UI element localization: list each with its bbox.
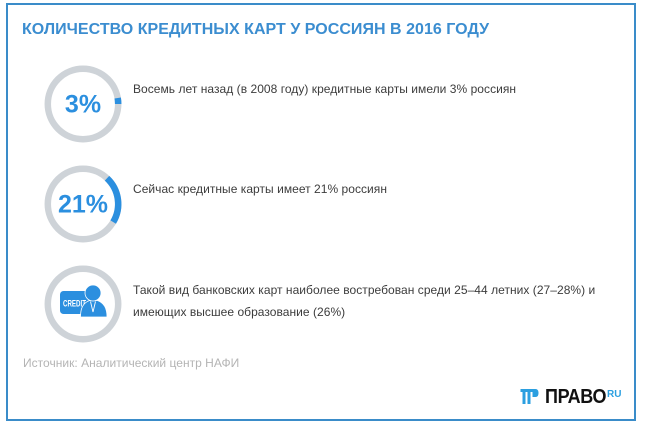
- logo: Pravo.ru: [520, 386, 621, 408]
- chart: 21 percent ring: [44, 166, 122, 242]
- text: demographic statistic: имеющих высшее образование (26%): [133, 305, 345, 319]
- chart: 3 percent ring: 3%: [65, 90, 101, 118]
- chart: 3 percent ring: [44, 66, 122, 142]
- chart: 21 percent ring: 21%: [58, 190, 108, 218]
- icon: logo mark: [520, 389, 538, 404]
- text: demographic statistic: [133, 283, 595, 319]
- logo wordmark: ПРАВО: [545, 386, 606, 408]
- icon: credit card and person in ring: CREDIT: [63, 298, 86, 308]
- text: 2008 statistic: Восемь лет назад (в 2008 году) кредитные карты имели 3% россиян: [133, 82, 516, 96]
- logo suffix: RU: [607, 389, 621, 400]
- icon: credit card and person in ring: [44, 266, 122, 342]
- text: demographic statistic: Такой вид банковских карт наиболее востребован среди 25–44 летних (27–28%) и: [133, 283, 595, 297]
- title: КОЛИЧЕСТВО КРЕДИТНЫХ КАРТ У РОССИЯН В 2016 ГОДУ: [22, 21, 489, 38]
- text: current statistic: Сейчас кредитные карты имеет 21% россиян: [133, 182, 387, 196]
- source note: Источник: Аналитический центр НАФИ: [23, 356, 239, 370]
